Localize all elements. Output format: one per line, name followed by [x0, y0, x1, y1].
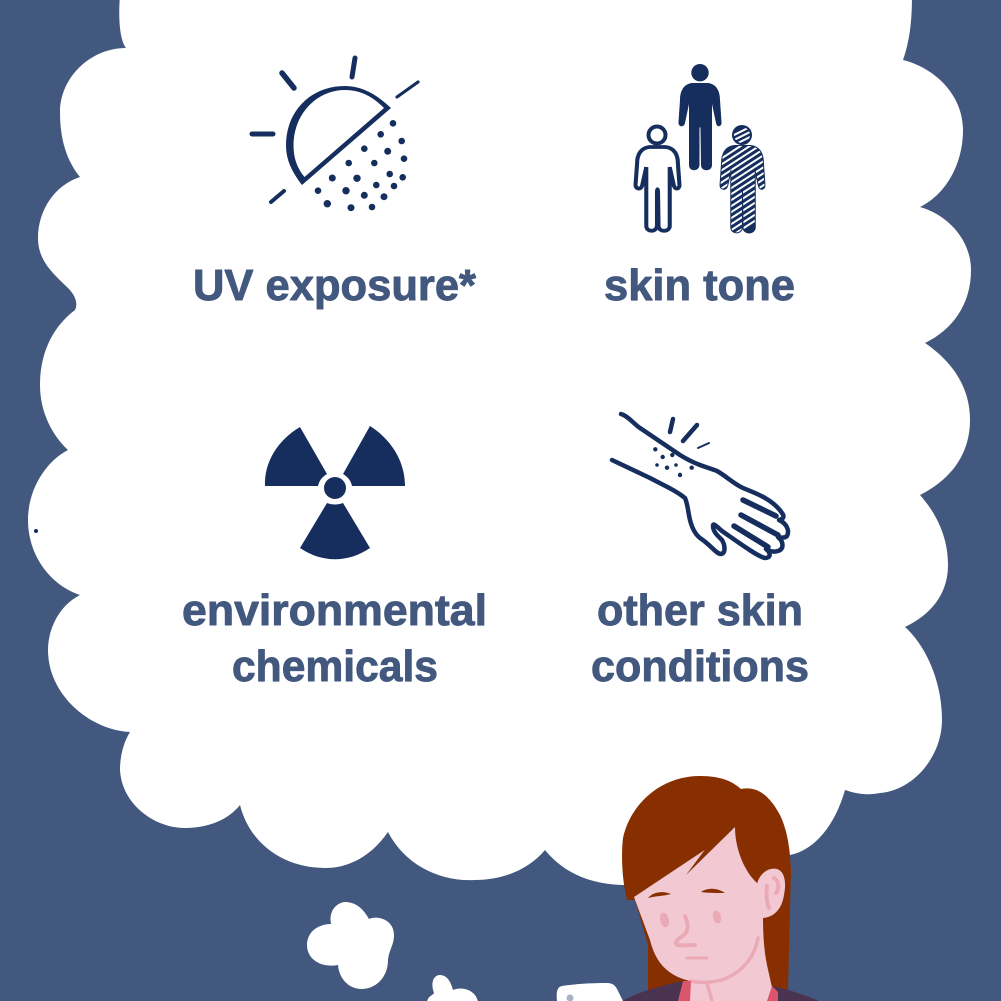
person: hatched — [720, 125, 766, 234]
label: environmental chemicals: environmental — [182, 586, 487, 635]
eyebrows — [648, 889, 725, 898]
ear detail — [767, 878, 778, 908]
person: solid — [678, 64, 722, 170]
small thought cloud — [307, 902, 394, 989]
label: environmental chemicals: chemicals — [232, 642, 438, 691]
stray dot — [34, 529, 38, 533]
woman looking at phone — [557, 776, 819, 1001]
icon: arm with rash — [612, 414, 788, 558]
phone — [557, 983, 623, 1001]
collar — [678, 981, 778, 1001]
icon: radiation — [265, 426, 405, 559]
face — [634, 827, 775, 1001]
eyes — [659, 910, 722, 928]
phone lens — [566, 994, 574, 1001]
ear — [757, 869, 785, 918]
jacket — [622, 981, 819, 1001]
icon: sun — [252, 58, 418, 211]
person: outline — [636, 126, 679, 231]
label: UV exposure: UV exposure* — [193, 261, 477, 310]
label: other skin conditions: conditions — [591, 642, 809, 691]
smallest thought cloud — [427, 975, 478, 1001]
label: other skin conditions: other skin — [597, 586, 803, 635]
finger gaps — [734, 500, 778, 547]
hair — [622, 776, 791, 990]
nose, mouth, jaw — [676, 916, 758, 1001]
icon: three people — [636, 64, 770, 246]
label: skin tone: skin tone — [604, 261, 795, 310]
label: other skin conditions — [591, 586, 809, 691]
label: environmental chemicals — [182, 586, 487, 691]
